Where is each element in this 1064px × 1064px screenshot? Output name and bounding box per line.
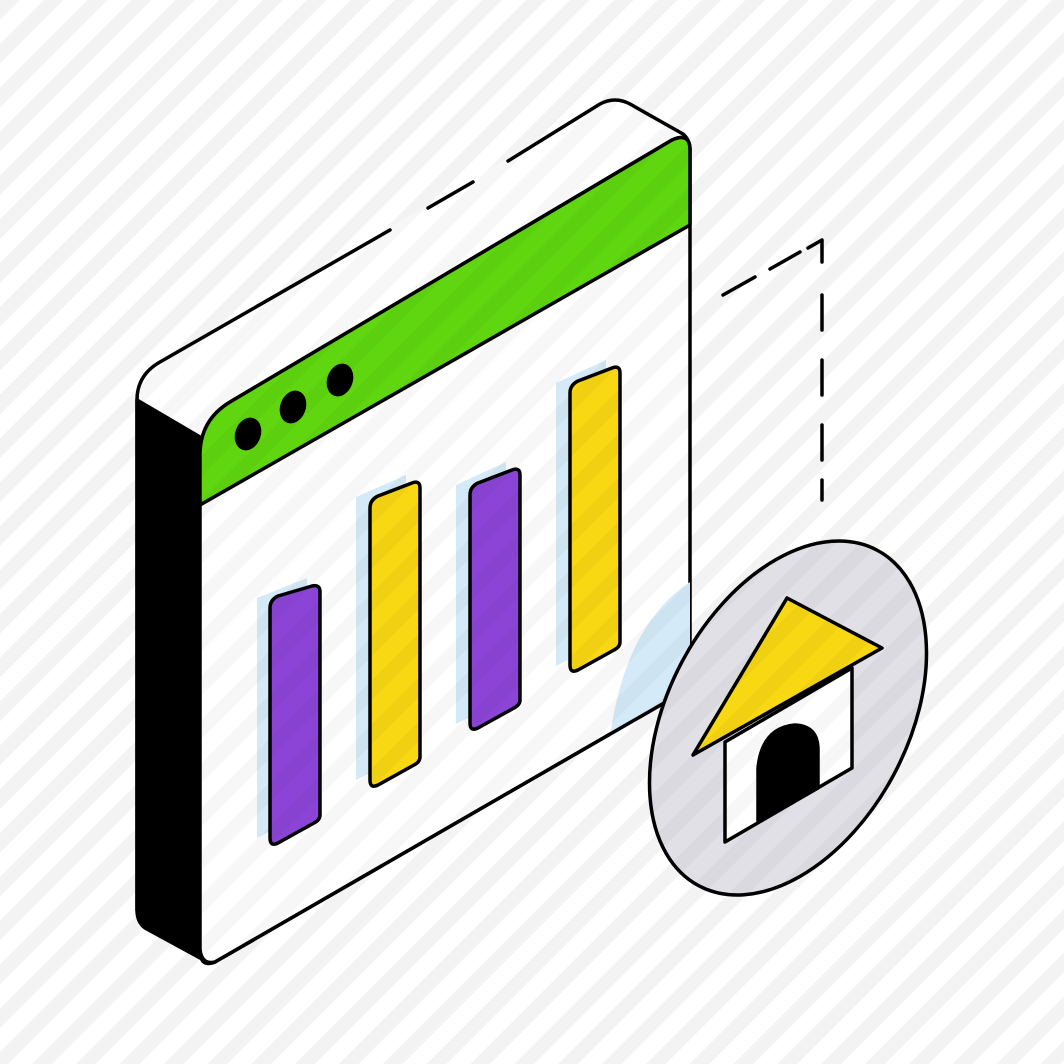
dashed guide lines <box>723 240 822 500</box>
green header bar <box>200 138 690 505</box>
home icon badge <box>593 494 983 942</box>
window front face <box>200 138 690 964</box>
bar chart <box>200 360 690 962</box>
window body back top & side <box>137 100 690 963</box>
